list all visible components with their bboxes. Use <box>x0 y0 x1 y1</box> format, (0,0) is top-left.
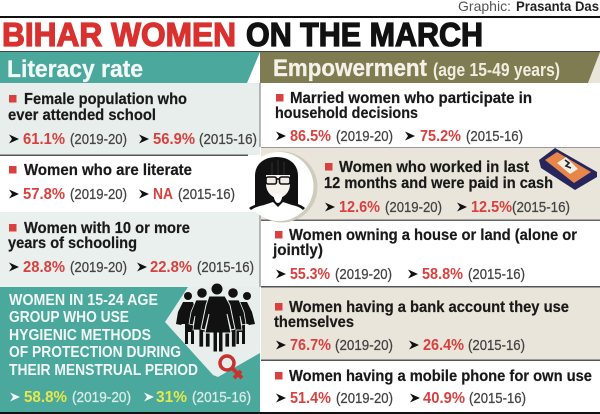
item: mobile phone: (2015-16) <box>469 391 526 407</box>
item: women with 10 or more years of schooling: years of schooling <box>8 235 137 252</box>
item: household decisions: 75.2% <box>420 128 461 145</box>
item: bank account: Women having a bank account they use <box>289 299 569 316</box>
item: worked and paid in cash <box>324 148 597 216</box>
item: women who are literate: (2015-16) <box>178 187 235 203</box>
icon: group of women <box>176 284 255 352</box>
empowerment rows background <box>261 83 600 412</box>
item: household decisions: household decisions <box>275 105 418 122</box>
callout: hygienic methods: 58.8% <box>24 389 67 406</box>
empowerment heading: Empowerment <box>273 55 427 82</box>
item: mobile phone: (2019-20) <box>336 391 393 407</box>
item: mobile phone: 51.4% <box>290 390 331 407</box>
item: female population who ever attended school: 56.9% <box>153 131 195 148</box>
item: owning a house or land: jointly) <box>272 242 323 259</box>
item: female population who ever attended school <box>8 91 257 148</box>
item: owning a house or land: 58.8% <box>422 266 463 283</box>
item: household decisions: (2019-20) <box>336 129 393 145</box>
item: mobile phone: 40.9% <box>423 390 465 407</box>
bottom rule <box>0 412 600 414</box>
item: owning a house or land: (2015-16) <box>468 267 525 283</box>
item: women with 10 or more years of schooling: Women with 10 or more <box>24 220 190 237</box>
icon: woman with glasses <box>244 152 318 222</box>
item: women who are literate: 57.8% <box>23 186 65 203</box>
item: female population who ever attended school: Female population who <box>24 91 187 108</box>
item: bank account: 76.7% <box>290 337 331 354</box>
callout: hygienic methods: (2019-20) <box>72 390 131 406</box>
item: women with 10 or more years of schooling: (2019-20) <box>70 260 127 276</box>
callout: hygienic methods: GROUP WHO USE <box>9 309 129 326</box>
item: worked and paid in cash: Women who worked in last <box>339 159 530 176</box>
item: women with 10 or more years of schooling: 28.8% <box>23 259 65 276</box>
item: female population who ever attended school: (2019-20) <box>70 132 127 148</box>
item: women with 10 or more years of schooling: (2015-16) <box>197 260 254 276</box>
callout: hygienic methods: OF PROTECTION DURING <box>9 344 181 361</box>
item: worked and paid in cash: (2015-16) <box>512 200 570 216</box>
item: female population who ever attended school: ever attended school <box>8 107 156 124</box>
item: bank account: themselves <box>274 314 354 331</box>
literacy heading: Literacy rate <box>7 56 143 83</box>
item: women who are literate <box>9 162 235 203</box>
item: household decisions: 86.5% <box>290 128 331 145</box>
title <box>2 16 483 53</box>
item: women who are literate: (2019-20) <box>70 187 127 203</box>
callout: hygienic methods <box>0 284 260 412</box>
panel: literacy rate <box>0 52 260 412</box>
callout: hygienic methods: 31% <box>156 389 187 406</box>
item: female population who ever attended school: (2015-16) <box>199 132 257 148</box>
item: bank account <box>274 299 569 354</box>
item: women who are literate: Women who are literate <box>24 162 192 179</box>
item: women who are literate: NA <box>153 186 173 203</box>
item: worked and paid in cash: 12.5% <box>471 199 512 216</box>
credit line <box>458 0 599 14</box>
item: bank account: (2019-20) <box>335 338 393 354</box>
empowerment heading: (age 15-49 years) <box>433 60 560 80</box>
callout: hygienic methods: WOMEN IN 15-24 AGE <box>9 292 158 309</box>
item: worked and paid in cash: 12.6% <box>339 199 380 216</box>
item: owning a house or land <box>272 227 577 283</box>
item: worked and paid in cash: (2019-20) <box>385 200 442 216</box>
item: women with 10 or more years of schooling <box>8 220 254 276</box>
icon: female symbol with magnifier <box>220 356 242 378</box>
item: bank account: 26.4% <box>423 337 464 354</box>
empowerment heading <box>260 52 600 83</box>
item: owning a house or land: (2019-20) <box>335 267 392 283</box>
item: bank account: (2015-16) <box>468 338 525 354</box>
callout: hygienic methods: HYGIENIC METHODS <box>9 327 151 344</box>
title: BIHAR WOMEN <box>2 16 236 53</box>
icon: bundle of cash <box>539 148 597 190</box>
literacy rows background <box>0 83 260 287</box>
panel: empowerment <box>260 52 600 412</box>
item: owning a house or land: 55.3% <box>290 266 330 283</box>
item: mobile phone <box>275 368 592 407</box>
callout: hygienic methods: (2015-16) <box>192 390 251 406</box>
item: women with 10 or more years of schooling: 22.8% <box>150 259 192 276</box>
item: female population who ever attended school: 61.1% <box>23 131 65 148</box>
callout: hygienic methods: THEIR MENSTRUAL PERIOD <box>9 362 198 379</box>
item: household decisions: (2015-16) <box>466 129 523 145</box>
item: owning a house or land: Women owning a house or land (alone or <box>289 227 577 244</box>
item: household decisions: Married women who participate in <box>290 90 532 107</box>
item: worked and paid in cash: 12 months and were paid in cash <box>324 175 553 192</box>
title: ON THE MARCH <box>246 16 483 53</box>
item: household decisions <box>275 90 532 145</box>
literacy heading <box>0 52 260 83</box>
